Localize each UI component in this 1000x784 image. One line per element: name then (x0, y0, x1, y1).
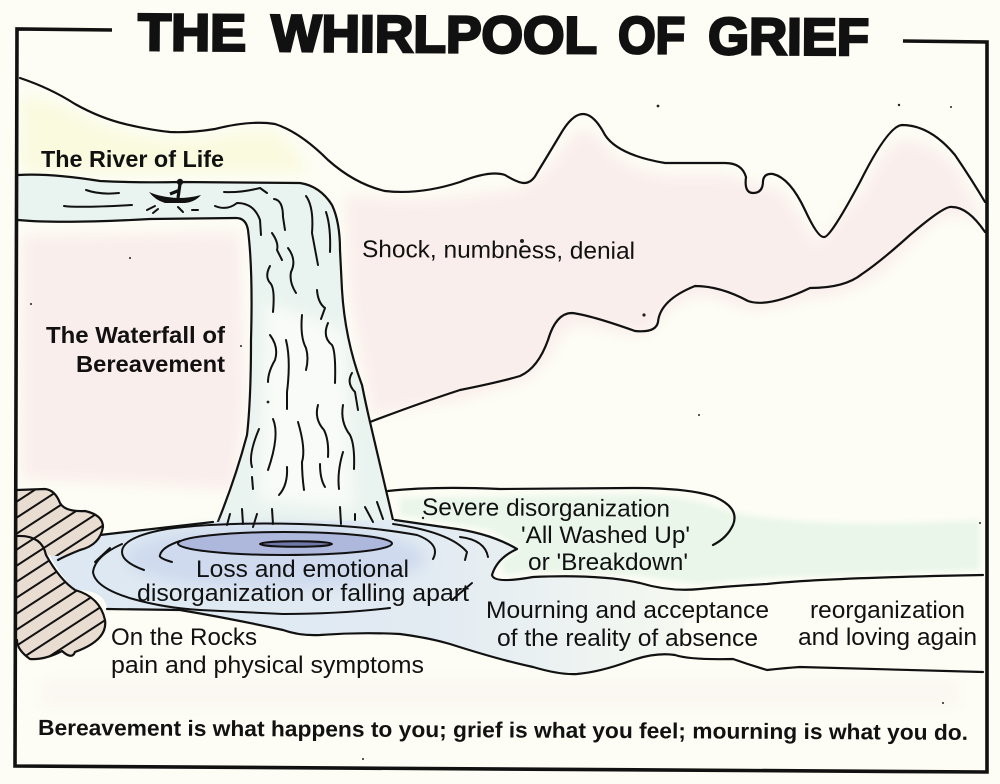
colour wash: pink mountain band (22, 130, 980, 490)
label: on the rocks: On the Rocks (111, 624, 257, 651)
label: shock: Shock, numbness, denial (362, 236, 635, 265)
title: GRIEF (708, 8, 869, 67)
colour wash: lower pink strip (40, 678, 960, 708)
title (138, 4, 869, 67)
whirlpool mid water (125, 526, 425, 590)
label: waterfall of bereavement: Bereavement (76, 351, 225, 377)
left bank of pool (100, 522, 213, 535)
waterfall white highlights (258, 300, 355, 510)
label: waterfall of bereavement (46, 322, 225, 377)
boat hull (149, 192, 201, 203)
label: reorganization: reorganization (810, 597, 965, 624)
whirlpool eye (260, 541, 332, 547)
label: mourning and acceptance: of the reality of absence (497, 625, 758, 652)
label: on the rocks (111, 624, 424, 679)
lower rock outline (17, 536, 105, 659)
river fill (18, 176, 393, 524)
label: severe disorganization: 'All Washed Up' (521, 522, 690, 549)
title: THE (138, 4, 246, 63)
rocks (17, 488, 106, 660)
label: reorganization (798, 597, 977, 651)
title: OF (618, 7, 685, 65)
label: loss and emotional disorganization: disorganization or falling apart (137, 580, 469, 607)
bottom statement: Bereavement is what happens to you; grief is what you feel; mourning is what you do. (38, 715, 968, 745)
scan specks (30, 104, 981, 760)
colour wash: yellow hills (22, 95, 310, 172)
label: loss and emotional disorganization (137, 556, 469, 607)
whirlpool (93, 524, 488, 614)
label: severe disorganization (422, 494, 690, 576)
label: on the rocks: pain and physical symptoms (111, 652, 424, 679)
waterfall ripple lines (64, 188, 383, 527)
label: mourning and acceptance (486, 597, 769, 652)
label: river of life: The River of Life (41, 146, 224, 172)
landscape outlines (20, 78, 985, 674)
label: severe disorganization: Severe disorganization (422, 494, 670, 523)
swirl lines (122, 524, 435, 570)
splashes (147, 206, 198, 213)
colour wash: green bank (400, 494, 980, 584)
title: WHIRLPOOL (271, 5, 597, 65)
near mountain ridge (370, 207, 985, 422)
label: severe disorganization: or 'Breakdown' (528, 549, 688, 576)
rock fill (17, 489, 105, 659)
severe disorganization bank (388, 488, 735, 545)
river of life (18, 175, 393, 524)
river bottom bank (18, 218, 252, 524)
label: waterfall of bereavement: The Waterfall of (46, 322, 225, 348)
label: loss and emotional disorganization: Loss and emotional (196, 556, 409, 583)
upper rock outline (17, 489, 103, 560)
rower (177, 179, 183, 185)
whirlpool centre (178, 532, 392, 555)
lower shore (107, 609, 983, 674)
pool water (50, 520, 690, 674)
label: reorganization: and loving again (798, 624, 977, 651)
rock hatching (17, 490, 104, 656)
river top bank (18, 175, 393, 520)
label: mourning and acceptance: Mourning and acceptance (486, 597, 769, 624)
river boat with figure (147, 179, 201, 213)
bay shore (395, 520, 983, 590)
far mountain ridge (20, 78, 985, 237)
